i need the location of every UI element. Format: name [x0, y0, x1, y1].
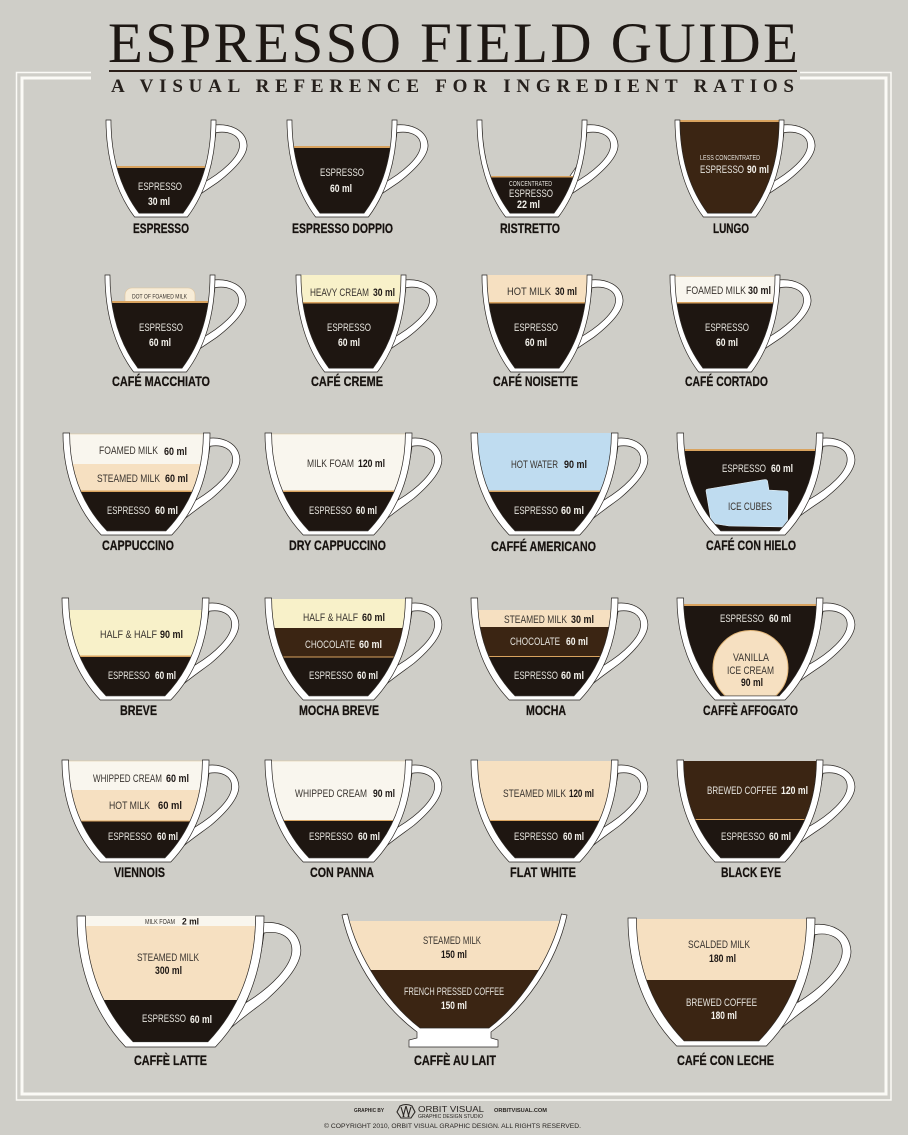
- cup: caffe americano: CAFFÉ AMERICANO: [491, 538, 596, 554]
- bowl: caffe au lait: CAFFÈ AU LAIT: [414, 1052, 496, 1068]
- cup: cafe con hielo: 60 ml: [771, 463, 793, 475]
- footer credits: ORBIT VISUAL: [418, 1105, 485, 1114]
- icon: orbit visual logo: [397, 1104, 415, 1118]
- cup: caffe affogato: VANILLA: [733, 652, 770, 664]
- cup: viennois: 60 ml: [157, 831, 178, 843]
- cup: dry cappuccino: [262, 433, 442, 553]
- cup: mocha breve: HALF & HALF: [303, 612, 358, 624]
- cup: viennois: HOT MILK: [109, 800, 151, 812]
- cup: viennois: [60, 760, 239, 880]
- cup: flat white: 60 ml: [563, 831, 584, 843]
- cup: ristretto: [470, 120, 618, 236]
- cup: breve: 60 ml: [155, 670, 176, 682]
- cup: cafe con hielo: CAFÉ CON HIELO: [706, 537, 796, 553]
- title: ESPRESSO FIELD GUIDE: [108, 12, 798, 75]
- cup: viennois: ESPRESSO: [108, 831, 152, 843]
- cup: black eye: BREWED COFFEE: [707, 785, 777, 797]
- cup: lungo: LUNGO: [713, 220, 749, 236]
- cup: caffe affogato: CAFFÈ AFFOGATO: [703, 702, 798, 718]
- cup: cafe cortado: [665, 275, 811, 389]
- cup: caffe latte: ESPRESSO: [142, 1013, 186, 1025]
- cup: ristretto: RISTRETTO: [500, 220, 560, 236]
- cup: cafe con leche: CAFÉ CON LECHE: [677, 1052, 774, 1068]
- cup: black eye: BLACK EYE: [721, 864, 781, 880]
- cup: cafe macchiato: ESPRESSO: [139, 322, 183, 334]
- cup: cafe noisette: HOT MILK: [507, 286, 552, 298]
- cup: cafe cortado: FOAMED MILK: [686, 285, 747, 297]
- cup: cafe creme: CAFÉ CREME: [311, 373, 383, 389]
- cup: dry cappuccino: 120 ml: [358, 458, 385, 470]
- cup: cafe con leche: 180 ml: [711, 1010, 737, 1022]
- cup: cappuccino: FOAMED MILK: [99, 445, 159, 457]
- cup: mocha breve: 60 ml: [359, 639, 382, 651]
- footer credits: [324, 1104, 581, 1130]
- cup: cafe con leche: 180 ml: [709, 953, 736, 965]
- cup: ristretto: 22 ml: [517, 199, 540, 211]
- cup: con panna: [262, 760, 442, 880]
- icon: ice cubes: [706, 480, 788, 527]
- cup: caffe latte: 2 ml: [182, 916, 199, 928]
- cup: lungo: LESS CONCENTRATED: [700, 153, 760, 162]
- cup: cafe macchiato: 60 ml: [149, 337, 171, 349]
- cup: viennois: WHIPPED CREAM: [93, 773, 162, 785]
- cup: cafe macchiato: DOT OF FOAMED MILK: [132, 294, 188, 300]
- footer credits: © COPYRIGHT 2010, ORBIT VISUAL GRAPHIC DESIGN. ALL RIGHTS RESERVED.: [324, 1123, 581, 1130]
- cup: dry cappuccino: MILK FOAM: [307, 458, 354, 470]
- cup: caffe latte: 60 ml: [190, 1014, 212, 1026]
- cup: mocha: 60 ml: [566, 636, 588, 648]
- cup: cafe creme: ESPRESSO: [327, 322, 371, 334]
- cup: espresso doppio: ESPRESSO: [320, 167, 364, 179]
- cup: cafe noisette: CAFÉ NOISETTE: [493, 373, 578, 389]
- cup: viennois: VIENNOIS: [114, 864, 165, 880]
- cup: caffe americano: ESPRESSO: [514, 505, 558, 517]
- bowl: caffe au lait: FRENCH PRESSED COFFEE: [404, 986, 504, 998]
- cup: cafe creme: 60 ml: [338, 337, 360, 349]
- cup: caffe latte: MILK FOAM: [145, 917, 175, 926]
- subtitle: A VISUAL REFERENCE FOR INGREDIENT RATIOS: [111, 76, 794, 97]
- cup: lungo: ESPRESSO: [700, 164, 744, 176]
- cup: mocha: ESPRESSO: [514, 670, 558, 682]
- cup: cafe noisette: 60 ml: [525, 337, 547, 349]
- footer credits: GRAPHIC DESIGN STUDIO: [418, 1114, 483, 1120]
- cup: con panna: ESPRESSO: [309, 831, 353, 843]
- cup: mocha: 60 ml: [561, 670, 584, 682]
- footer credits: ORBITVISUAL.COM: [494, 1108, 547, 1114]
- cup: caffe affogato: [670, 598, 855, 718]
- cup: caffe latte: [75, 916, 301, 1068]
- cup: cafe noisette: [475, 275, 623, 389]
- cup: cafe macchiato: [100, 275, 246, 389]
- cup: dry cappuccino: DRY CAPPUCCINO: [289, 537, 386, 553]
- cup: ristretto: ESPRESSO: [509, 188, 553, 200]
- cup: cafe macchiato: CAFÉ MACCHIATO: [112, 373, 210, 389]
- cup: caffe affogato: ICE CREAM: [727, 665, 774, 677]
- cup: mocha breve: CHOCOLATE: [305, 639, 355, 651]
- cup: espresso: ESPRESSO: [133, 220, 189, 236]
- cup: breve: HALF & HALF: [100, 629, 157, 641]
- cup: cafe cortado: CAFÉ CORTADO: [685, 373, 768, 389]
- cup: cafe con hielo: ESPRESSO: [722, 463, 766, 475]
- cup: con panna: WHIPPED CREAM: [295, 788, 367, 800]
- cup: cappuccino: [60, 433, 240, 553]
- cup: flat white: ESPRESSO: [514, 831, 558, 843]
- cup: mocha breve: MOCHA BREVE: [299, 702, 379, 718]
- cup: caffe affogato: 60 ml: [769, 613, 791, 625]
- cup: mocha breve: [262, 598, 442, 718]
- cup: breve: BREVE: [120, 702, 157, 718]
- cup: flat white: [468, 760, 648, 880]
- bowl: caffe au lait: 150 ml: [441, 949, 467, 961]
- cup: cafe creme: 30 ml: [373, 287, 395, 299]
- cup: mocha: 30 ml: [571, 614, 594, 626]
- cup: ristretto: CONCENTRATED: [509, 179, 552, 188]
- cup: cappuccino: 60 ml: [155, 505, 178, 517]
- cup: cappuccino: ESPRESSO: [107, 505, 150, 517]
- cup: cappuccino: 60 ml: [165, 473, 188, 485]
- title rule: [109, 70, 797, 72]
- cup: caffe latte: CAFFÈ LATTE: [134, 1052, 207, 1068]
- cup: viennois: 60 ml: [166, 773, 189, 785]
- cup: mocha: STEAMED MILK: [504, 614, 568, 626]
- cup: con panna: CON PANNA: [310, 864, 374, 880]
- bowl: caffe au lait: [340, 914, 570, 1068]
- cup: black eye: 120 ml: [781, 785, 808, 797]
- cup: dry cappuccino: ESPRESSO: [309, 505, 352, 517]
- cup: caffe americano: HOT WATER: [511, 459, 558, 471]
- cup: flat white: 120 ml: [569, 788, 594, 800]
- cup: cafe con hielo: [670, 433, 855, 553]
- cup: cafe con leche: SCALDED MILK: [688, 939, 750, 951]
- cup: caffe latte: 300 ml: [155, 965, 182, 977]
- cup: black eye: [670, 760, 855, 880]
- cup: lungo: 90 ml: [747, 164, 769, 176]
- cup: mocha breve: 60 ml: [362, 612, 385, 624]
- cup: caffe americano: 90 ml: [564, 459, 587, 471]
- cup: flat white: FLAT WHITE: [510, 864, 576, 880]
- footer credits: GRAPHIC BY: [354, 1108, 384, 1114]
- cup: mocha breve: 60 ml: [357, 670, 378, 682]
- cup: con panna: 60 ml: [358, 831, 380, 843]
- cup: cappuccino: 60 ml: [164, 446, 187, 458]
- cup: caffe affogato: 90 ml: [741, 677, 763, 689]
- cup: mocha breve: ESPRESSO: [309, 670, 353, 682]
- cup: flat white: STEAMED MILK: [503, 788, 567, 800]
- cup: mocha: [468, 598, 648, 718]
- cup: lungo: [670, 120, 815, 236]
- cup: breve: ESPRESSO: [108, 670, 150, 682]
- cup: espresso: [100, 120, 247, 236]
- cup: caffe affogato: ESPRESSO: [720, 613, 764, 625]
- cup: espresso: ESPRESSO: [138, 181, 182, 193]
- cup: viennois: 60 ml: [158, 800, 182, 812]
- cup: breve: 90 ml: [160, 629, 183, 641]
- cup: cafe noisette: ESPRESSO: [514, 322, 558, 334]
- cup: dry cappuccino: 60 ml: [356, 505, 377, 517]
- cup: caffe latte: STEAMED MILK: [137, 952, 200, 964]
- cup: espresso: 30 ml: [148, 196, 170, 208]
- cup: cafe con leche: [625, 918, 851, 1068]
- cup: espresso doppio: [280, 120, 428, 236]
- cup: cappuccino: CAPPUCCINO: [102, 537, 174, 553]
- cup: espresso doppio: ESPRESSO DOPPIO: [292, 220, 393, 236]
- cup: caffe americano: 60 ml: [561, 505, 584, 517]
- cup: espresso doppio: 60 ml: [330, 183, 352, 195]
- cup: mocha: CHOCOLATE: [510, 636, 560, 648]
- cup: black eye: 60 ml: [769, 831, 791, 843]
- cup: cafe noisette: 30 ml: [555, 286, 577, 298]
- cup: cafe cortado: 60 ml: [716, 337, 738, 349]
- cup: cafe cortado: 30 ml: [748, 285, 771, 297]
- cup: black eye: ESPRESSO: [721, 831, 765, 843]
- cup: con panna: 90 ml: [373, 788, 395, 800]
- cup: cafe creme: HEAVY CREAM: [310, 287, 369, 299]
- cup: cappuccino: STEAMED MILK: [97, 473, 161, 485]
- cup: cafe creme: [290, 275, 437, 389]
- cup: breve: [60, 598, 239, 718]
- cup: mocha: MOCHA: [526, 702, 566, 718]
- cup: caffe americano: [468, 433, 648, 554]
- bowl: caffe au lait: 150 ml: [441, 1000, 467, 1012]
- cup: cafe con leche: BREWED COFFEE: [686, 997, 757, 1009]
- bowl: caffe au lait: STEAMED MILK: [423, 935, 481, 947]
- cup: cafe con hielo: ICE CUBES: [728, 501, 772, 513]
- cup: cafe cortado: ESPRESSO: [705, 322, 749, 334]
